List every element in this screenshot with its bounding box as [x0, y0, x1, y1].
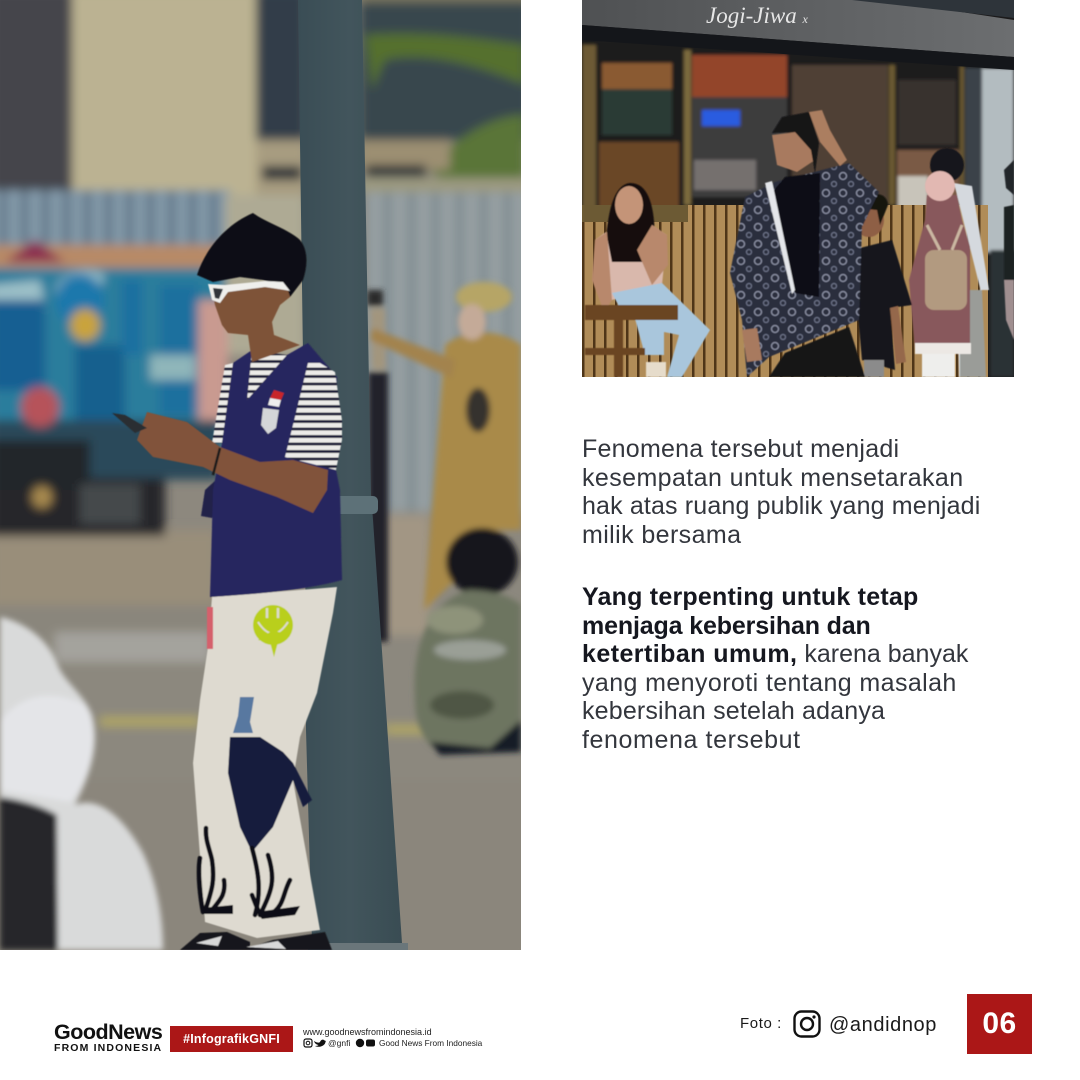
- tag: #InfografikGNFI: #InfografikGNFI: [183, 1032, 280, 1046]
- flames: [199, 828, 290, 915]
- photo: people at the crossing: [582, 0, 1014, 377]
- shop windows: [582, 40, 982, 215]
- boy in black tee: [852, 240, 912, 370]
- pole: [298, 0, 402, 943]
- text block: key message paragraph: kebersihan setelah adanya: [582, 697, 885, 725]
- tan dressed pedestrian: [424, 332, 521, 610]
- text block: intro paragraph: Fenomena tersebut menjadi: [582, 435, 899, 463]
- main man: [730, 163, 879, 377]
- social links: www.goodnewsfromindonesia.id: [303, 1027, 432, 1037]
- small patch: [233, 697, 254, 733]
- text block: key message paragraph: fenomena tersebut: [582, 726, 801, 754]
- text block: key message paragraph: ketertiban umum, karena banyak: [582, 640, 968, 668]
- logo: GoodNews From Indonesia: GoodNews: [54, 1020, 162, 1044]
- car: [0, 617, 163, 950]
- awning lettering: Jogi-Jiwa x: [706, 3, 808, 28]
- text block: intro paragraph: milik bersama: [582, 520, 741, 548]
- logo: GoodNews From Indonesia: FROM INDONESIA: [54, 1042, 162, 1054]
- page number: [967, 994, 1032, 1054]
- man in white hoodie: [930, 148, 964, 182]
- right edge person: [1004, 160, 1014, 195]
- text block: key message paragraph: [582, 583, 968, 754]
- girl with backpack: [909, 195, 970, 350]
- phone: [112, 413, 147, 433]
- photo credit: Foto :: [740, 1015, 782, 1032]
- tag: #InfografikGNFI: [170, 1026, 293, 1052]
- photo credit: [740, 1010, 937, 1038]
- text block: key message paragraph: Yang terpenting untuk tetap: [582, 583, 919, 611]
- social links: @gnfi: [328, 1038, 350, 1048]
- right sleeve: [285, 363, 342, 470]
- social links: [303, 1027, 482, 1048]
- seated woman: [605, 183, 655, 267]
- pants: [193, 587, 337, 938]
- front arm: [137, 412, 328, 513]
- photo: boy leaning on pole: [0, 0, 521, 950]
- vest: [210, 343, 342, 597]
- shirt: [247, 350, 287, 400]
- dark pedestrian behind pole: [368, 372, 388, 642]
- text block: intro paragraph: [582, 435, 980, 548]
- wooden slats: [582, 205, 988, 377]
- text block: intro paragraph: kesempatan untuk mensetarakan: [582, 464, 964, 492]
- hair: [197, 213, 306, 297]
- text block: intro paragraph: hak atas ruang publik yang menjadi: [582, 492, 980, 520]
- awning: [582, 0, 1014, 57]
- page number: 06: [982, 1007, 1017, 1040]
- social links: Good News From Indonesia: [379, 1038, 482, 1048]
- photo credit: @andidnop: [829, 1014, 937, 1036]
- neck & face: [211, 285, 300, 362]
- dangling strap: [201, 478, 224, 518]
- shoes: [180, 932, 250, 950]
- text block: key message paragraph: menjaga kebersihan dan: [582, 612, 871, 640]
- social icons: [303, 1038, 375, 1048]
- sunglasses: [208, 281, 290, 303]
- icon: instagram: [793, 1010, 821, 1038]
- bandana: [228, 737, 312, 852]
- seated person: [446, 528, 518, 596]
- flag badge: [270, 390, 284, 400]
- smiley patch: [253, 605, 293, 657]
- text block: key message paragraph: yang menyoroti tentang masalah: [582, 668, 957, 696]
